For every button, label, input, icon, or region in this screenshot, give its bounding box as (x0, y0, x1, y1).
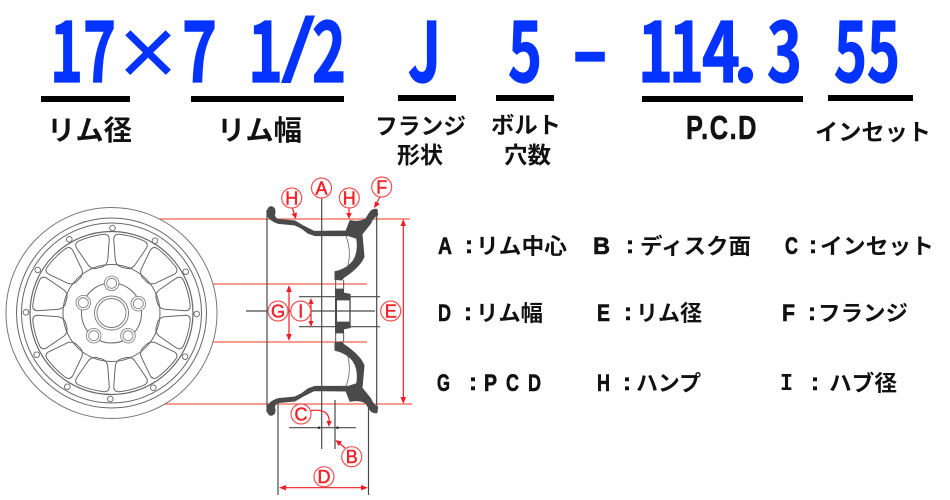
label: bolt holes (491, 112, 561, 168)
arrow: H right hump (346, 207, 352, 219)
legend G: C (506, 370, 519, 397)
legend A: : (465, 232, 473, 259)
marker E: E (385, 301, 397, 321)
legend B: : (626, 232, 634, 259)
marker E (381, 301, 401, 321)
label: rim diameter: リム径 (47, 115, 132, 146)
inset tick marks (318, 426, 339, 429)
legend G (437, 369, 541, 397)
legend H: : (623, 369, 631, 396)
reference lines (246, 198, 380, 495)
legend I: I (780, 371, 793, 398)
wheel cross-section (246, 198, 380, 495)
marker D: D (318, 467, 330, 487)
lug holes (76, 276, 146, 343)
legend C: C (785, 233, 798, 260)
legend C: インセット (820, 234, 934, 259)
cross-section lower half (267, 311, 378, 415)
marker F (372, 177, 392, 197)
arrow: I hub bore (308, 298, 314, 327)
marker D (314, 467, 334, 487)
legend D: D (438, 300, 451, 327)
arrow: C inset (311, 410, 332, 427)
marker B: B (346, 447, 358, 467)
marker G: G (271, 301, 285, 321)
marker I: I (298, 301, 303, 321)
legend A: A (438, 233, 452, 260)
legend G: P (484, 370, 497, 397)
legend F: フランジ (818, 301, 908, 326)
marker G (268, 301, 288, 321)
marker H second: H (343, 188, 356, 208)
legend H (597, 369, 701, 397)
legend E: リム径 (636, 301, 702, 326)
marker A (312, 178, 332, 198)
legend B (593, 232, 751, 260)
legend D: : (464, 299, 472, 326)
arrow: E rim diameter (400, 219, 406, 404)
size code: PCD (638, 0, 802, 106)
legend F: : (808, 299, 816, 326)
size code: rim width: / (281, 0, 316, 102)
legend G: D (528, 370, 541, 397)
marker C (291, 404, 311, 424)
legend I: : (811, 369, 819, 396)
arrow: G PCD (286, 285, 292, 341)
marker H: H (285, 188, 298, 208)
legend I (780, 369, 897, 398)
legend I: ハブ径 (829, 371, 897, 396)
legend A: リム中心 (476, 234, 567, 259)
wheel front view (6, 208, 217, 418)
legend H: ハンプ (636, 371, 701, 396)
underline bars (41, 95, 913, 102)
label: flange shape (375, 113, 466, 168)
cross-section upper half (267, 207, 378, 311)
legend H: H (597, 370, 610, 397)
size code: rim width (182, 0, 346, 106)
legend E: E (597, 300, 610, 327)
arrow: H left hump (292, 207, 297, 219)
marker A: A (315, 178, 328, 198)
label: inset: インセット (815, 119, 931, 145)
legend B: ディスク面 (640, 234, 751, 259)
spoke windows (31, 232, 192, 394)
center bore (94, 296, 128, 330)
marker H (282, 188, 302, 208)
marker F: F (376, 177, 387, 197)
label: PCD: P.C.D (686, 109, 758, 146)
legend G: G (437, 370, 450, 397)
arrow: F flange (374, 197, 380, 208)
legend A (438, 232, 567, 260)
legend C: : (809, 232, 817, 259)
label: bolt holes: ボルト (491, 112, 561, 138)
arrow: B disc face (336, 440, 345, 448)
legend D: リム幅 (476, 301, 543, 326)
marker C: C (294, 404, 308, 424)
label: flange shape: フランジ (375, 113, 466, 139)
label: bolt holes: 穴数 (504, 142, 551, 168)
legend E: : (624, 299, 632, 326)
label: rim width: リム幅 (217, 115, 302, 146)
arrow: D rim width (279, 485, 368, 490)
legend F: F (782, 300, 795, 327)
marker B (342, 447, 362, 467)
legend B: B (593, 233, 610, 260)
legend G: : (469, 369, 477, 396)
label: flange shape: 形状 (397, 142, 443, 168)
red dimension lines (150, 219, 412, 404)
rim rivets (23, 225, 200, 402)
marker H second (339, 188, 359, 208)
legend C (785, 232, 934, 260)
marker I (291, 301, 311, 321)
legend E (597, 299, 702, 327)
legend D (438, 299, 543, 327)
legend F (782, 299, 908, 327)
